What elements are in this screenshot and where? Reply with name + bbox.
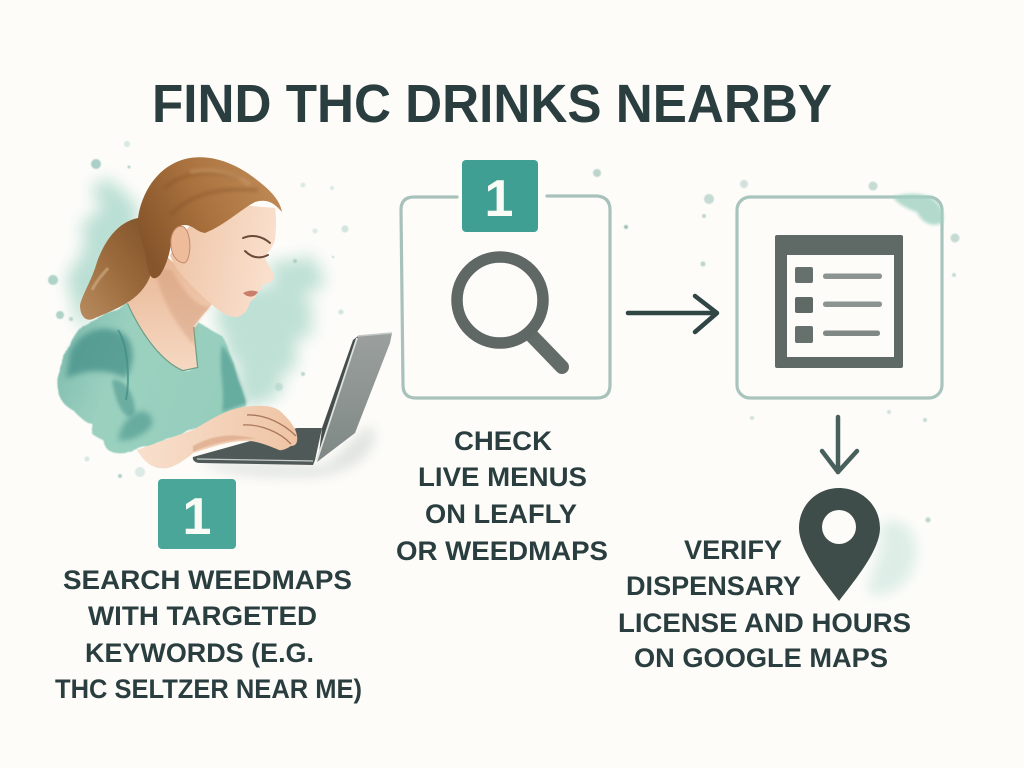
text: check menus step: LIVE MENUS <box>418 462 587 492</box>
shirt <box>57 303 247 453</box>
face <box>155 205 276 345</box>
panel border <box>401 196 610 398</box>
text: search step: THC SELTZER NEAR ME) <box>55 674 362 704</box>
text: search step: KEYWORDS (E.G. <box>85 638 314 668</box>
paint splatter <box>48 141 348 478</box>
text: verify step: VERIFY <box>684 535 782 565</box>
title: FIND THC DRINKS NEARBY <box>152 74 832 134</box>
badge: step 1 left <box>158 479 236 549</box>
panel: live menu step <box>737 194 943 398</box>
panel: magnifier step <box>401 160 610 398</box>
arm and hands <box>137 406 297 468</box>
illustration: woman using laptop <box>48 141 392 478</box>
eye and brow <box>243 236 270 257</box>
badge: step 1 middle <box>462 160 538 232</box>
teal stain on corner <box>893 194 943 225</box>
neck shadow <box>155 268 212 345</box>
neck <box>128 255 215 370</box>
text: check menus step: CHECK <box>454 426 552 456</box>
badge: step 1 middle: 1 <box>485 170 513 228</box>
text: verify step: DISPENSARY <box>626 571 801 601</box>
text: verify step: LICENSE AND HOURS <box>618 608 911 638</box>
text: search step <box>55 565 362 704</box>
laptop base <box>193 428 322 465</box>
text: check menus step: ON LEAFLY <box>425 499 577 529</box>
text: check menus step: OR WEEDMAPS <box>396 536 608 566</box>
paint splatter right side <box>593 169 960 522</box>
hair <box>138 157 282 278</box>
laptop shadow <box>200 425 374 477</box>
icon: menu window <box>775 235 903 368</box>
text: verify step: ON GOOGLE MAPS <box>634 643 888 673</box>
arrow: down <box>822 417 857 472</box>
watercolor wash behind woman <box>69 189 319 412</box>
text: verify step <box>618 535 911 673</box>
laptop screen <box>197 333 392 462</box>
lips <box>243 291 258 297</box>
text: check menus step <box>396 426 608 566</box>
ear <box>171 226 190 263</box>
ponytail <box>80 218 153 320</box>
text: search step: SEARCH WEEDMAPS <box>63 565 352 595</box>
watercolor wash near pin <box>868 521 916 595</box>
text: search step: WITH TARGETED <box>88 601 317 631</box>
icon: magnifying glass <box>457 257 562 367</box>
icon: location pin <box>799 488 880 601</box>
arrow: right <box>628 296 717 332</box>
badge: step 1 left: 1 <box>183 488 211 546</box>
panel border <box>737 197 942 398</box>
